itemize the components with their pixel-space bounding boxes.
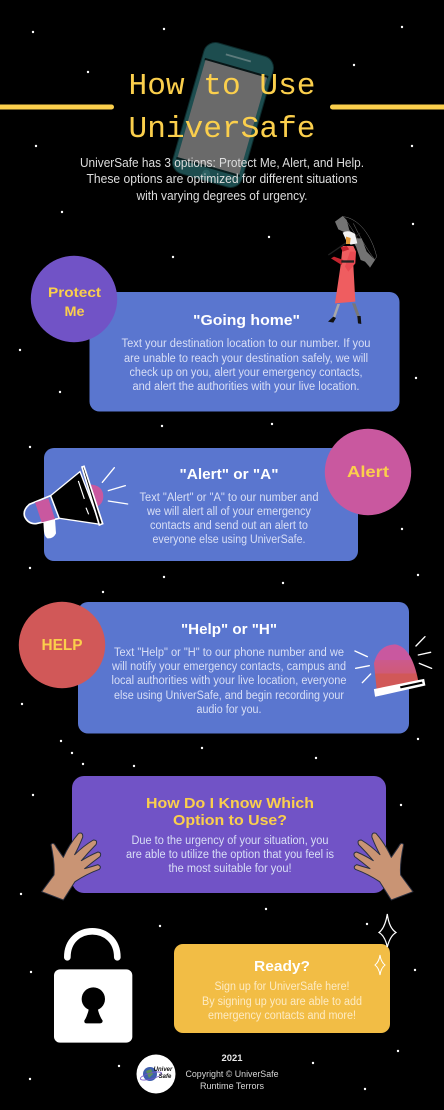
description: everyone else using UniverSafe. [152,534,306,546]
title: How to Use [128,69,316,104]
badge: help: HELP [42,637,82,654]
description: are able to utilize the option that you feel is [126,849,334,861]
badge: protect me: Protect [48,284,101,300]
title: UniverSafe [128,112,316,147]
heading: How Do I Know Which [146,795,314,812]
description: Text your destination location to our number. If you [122,338,370,350]
description: local authorities with your live location, everyone [112,675,346,687]
badge: protect me [31,256,117,342]
intro text [80,155,364,203]
badge: help [19,602,105,688]
description [122,338,370,393]
description [140,492,318,546]
description: audio for you. [196,704,262,716]
card background [78,602,409,734]
icon: left hand [42,833,101,900]
icon: large sparkle [379,914,396,947]
footer logo: Safe [159,1074,172,1080]
description: Due to the urgency of your situation, you [132,835,328,847]
description: Sign up for UniverSafe here! [214,981,350,993]
badge: alert: Alert [347,464,390,481]
description: are unable to reach your destination safely, we will [124,353,368,365]
footer credits: Copyright © UniverSafe [186,1069,278,1079]
panel: protect me [31,216,400,412]
card background [90,292,400,412]
intro text: These options are optimized for different situations [86,171,358,186]
description: contacts and send out an alert to [150,520,308,532]
badge: protect me: Me [64,303,85,319]
title rule: right [330,104,444,110]
description [202,981,362,1022]
footer credits: Runtime Terrors [200,1081,264,1091]
icon: tilted smartphone [170,40,276,190]
footer credits: 2021 [222,1053,243,1064]
description: Text "Help" or "H" to our phone number and we [114,647,344,659]
badge: alert [325,429,411,515]
description: and alert the authorities with your live location. [132,381,360,393]
footer logo: Univer [154,1067,173,1073]
description: else using UniverSafe, and begin recording your [114,690,344,702]
icon: padlock [54,931,132,1043]
panel: which option [42,776,413,900]
title rule: left [0,104,114,110]
description: check up on you, alert your emergency contacts, [130,367,362,379]
intro text: UniverSafe has 3 options: Protect Me, Alert, and Help. [80,155,364,170]
panel: help [19,602,432,734]
illustration: woman with umbrella [328,216,377,324]
icon: siren [355,637,432,696]
heading: "Help" or "H" [181,621,277,638]
panel: ready sign-up [174,944,390,1033]
heading: Ready? [254,958,310,975]
description: will notify your emergency contacts, campus and [111,661,346,673]
panel: alert [24,429,411,561]
intro text: with varying degrees of urgency. [136,188,308,203]
heading [146,795,314,829]
description: emergency contacts and more! [208,1010,356,1022]
heading: "Going home" [193,312,300,329]
icon: megaphone [24,466,128,538]
description: the most suitable for you! [168,863,292,875]
title [128,69,316,147]
card background [44,448,358,561]
card background [174,944,390,1033]
description [126,835,334,875]
footer logo [136,1054,176,1094]
description [111,647,346,716]
description: we will alert all of your emergency [146,506,311,518]
icon: right hand [354,833,413,900]
description: Text "Alert" or "A" to our number and [140,492,318,504]
icon: small sparkle [375,955,385,975]
description: By signing up you are able to add [202,996,362,1008]
heading: Option to Use? [173,812,287,829]
heading: "Alert" or "A" [180,466,278,483]
card background [72,776,386,893]
footer credits [186,1053,278,1091]
